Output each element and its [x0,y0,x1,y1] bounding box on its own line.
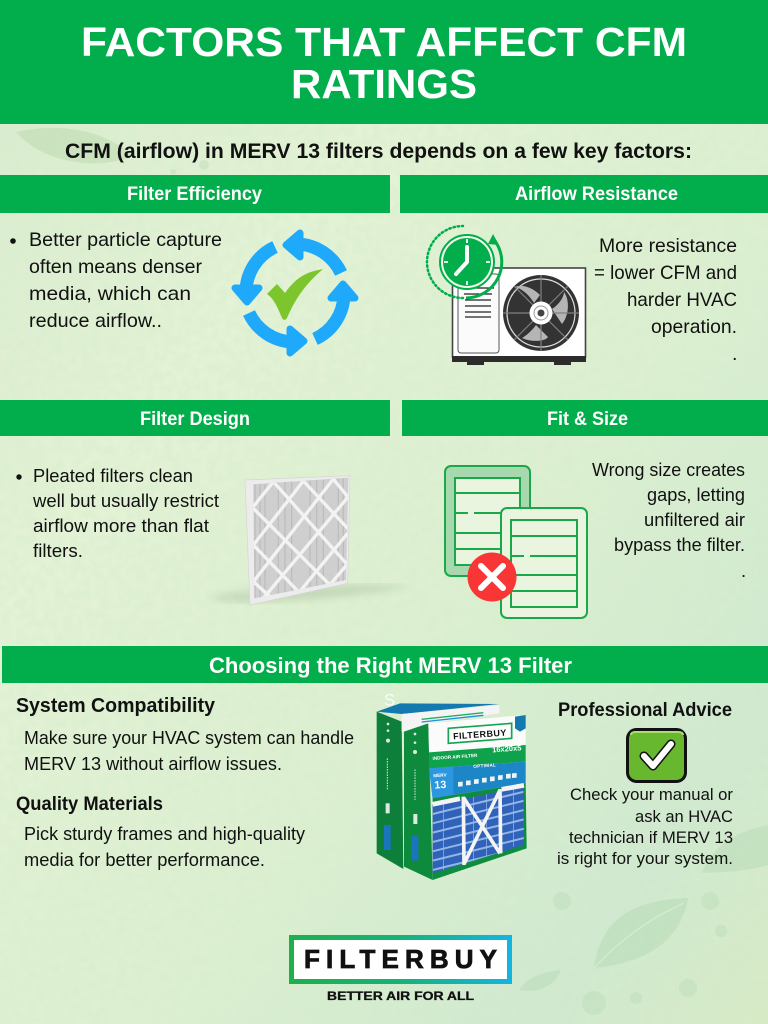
bullet text: filter efficiency: Better particle capture [29,229,222,251]
bullet text: filter design: filters. [33,540,83,561]
image: merv 13 filter boxes: OPTIMAL [473,762,496,769]
text block: professional advice: is right for your system. [557,849,733,868]
logo: filterbuy: FILTERBUY [304,944,497,974]
bullet text: filter design: airflow more than flat [33,515,209,536]
bullet text: filter efficiency: often means denser [29,256,203,278]
text: airflow resistance: harder HVAC [627,289,737,311]
text: fit and size: . [741,560,746,581]
logo: filterbuy [292,938,510,1003]
heading bar: filter design: Filter Design [140,409,250,430]
bullet text: filter efficiency [10,229,222,332]
logo: filterbuy: BETTER AIR FOR ALL [327,989,474,1003]
heading bar: filter efficiency [0,175,390,213]
text: airflow resistance: More resistance [599,235,737,257]
title: RATINGS [291,61,477,107]
image: merv 13 filter boxes: 13 [434,779,447,792]
heading bar: choosing the right filter [2,646,768,683]
image: merv 13 filter boxes: MERV [433,772,448,778]
heading bar: filter efficiency: Filter Efficiency [127,184,262,205]
title [81,19,687,107]
icon: green check box [628,730,686,782]
bullet text: filter design [16,465,219,561]
icon: circular arrows with check mark [235,233,355,353]
text: fit and size: unfiltered air [644,509,745,530]
heading bar: airflow resistance: Airflow Resistance [515,184,678,205]
bullet text: filter efficiency: reduce airflow.. [29,310,162,332]
image: merv 13 filter boxes [377,690,527,880]
text: fit and size: bypass the filter. [614,534,745,555]
title: FACTORS THAT AFFECT CFM [81,19,687,65]
text: airflow resistance: = lower CFM and [594,262,737,284]
heading bar: choosing the right filter: Choosing the Right MERV 13 Filter [209,653,572,678]
image: pleated air filter [208,476,412,605]
bullet text: filter efficiency: media, which can [29,283,191,305]
text block: system compatibility: MERV 13 without airflow issues. [24,753,282,774]
text block: quality materials [16,794,306,870]
header banner [0,0,768,124]
heading bar: airflow resistance [400,175,768,213]
panel: filter efficiency [0,175,390,353]
text block: system compatibility [16,695,354,774]
panel: filter design [0,400,412,605]
icon: mismatched filters with red x [445,466,587,618]
text block: professional advice: technician if MERV 13 [569,828,733,847]
image: merv 13 filter boxes: INDOOR AIR FILTER [432,753,478,761]
heading bar: filter design [0,400,390,436]
subtitle: CFM (airflow) in MERV 13 filters depends on a few key factors: [65,140,692,163]
image: merv 13 filter boxes: S [384,690,395,709]
text: fit and size [592,459,746,581]
text block: quality materials: media for better performance. [24,849,265,870]
text: airflow resistance: operation. [651,316,737,338]
bullet text: filter design: Pleated filters clean [33,465,193,486]
panel: fit and size [402,400,768,618]
text block: professional advice: Professional Advice [558,700,732,721]
bullet text: filter design: well but usually restrict [32,490,219,511]
image: merv 13 filter boxes: 16x20x5 [492,743,522,754]
text block: professional advice: Check your manual or [570,785,733,804]
text block: professional advice: ask an HVAC [635,807,733,826]
text block: system compatibility: Make sure your HVAC system can handle [24,727,354,748]
heading bar: fit and size: Fit & Size [547,409,628,430]
text: airflow resistance [594,235,737,365]
text: fit and size: Wrong size creates [592,459,745,480]
icon: air conditioner unit with clock [427,226,586,365]
section: choosing the right filter [2,646,768,880]
text: fit and size: gaps, letting [647,484,745,505]
text block: professional advice [557,700,733,868]
text block: system compatibility: System Compatibility [16,695,216,717]
text block: quality materials: Quality Materials [16,794,163,815]
panel: airflow resistance [400,175,768,365]
text: airflow resistance: . [732,343,737,365]
heading bar: fit and size [402,400,768,436]
text block: quality materials: Pick sturdy frames and high-quality [24,823,306,844]
image: merv 13 filter boxes: FILTERBUY [453,728,507,741]
